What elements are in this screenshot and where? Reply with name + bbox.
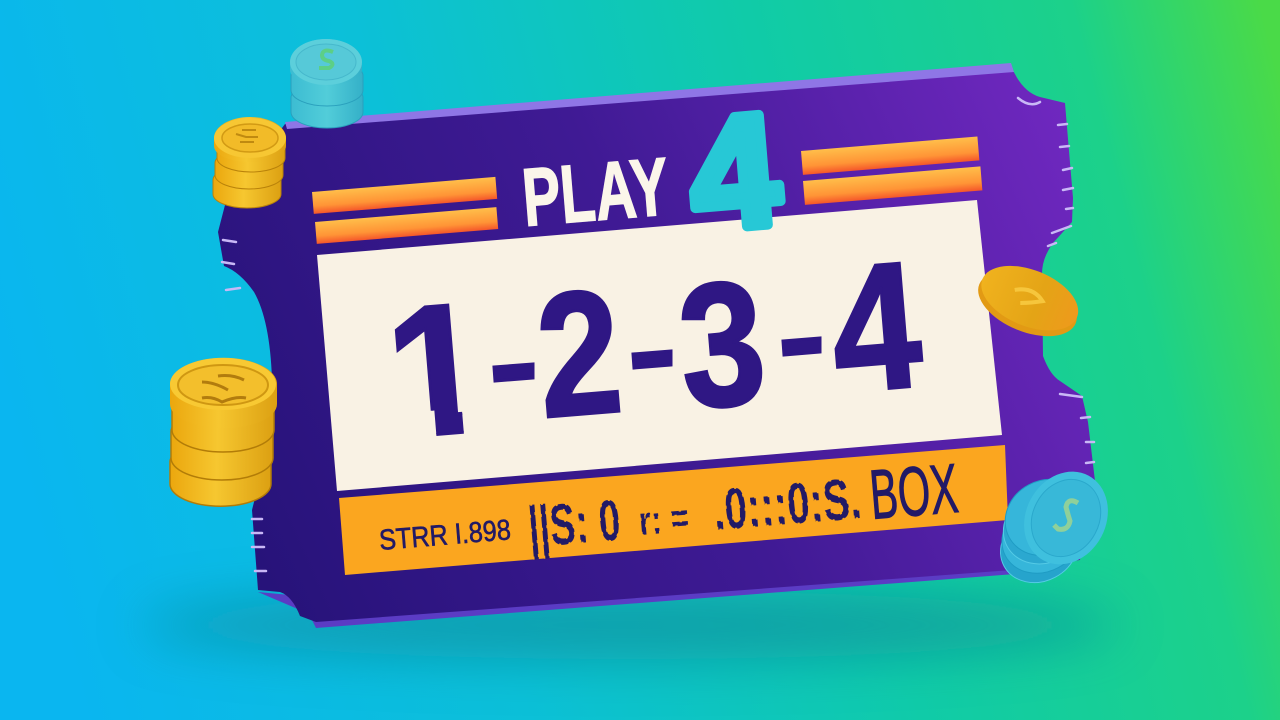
icon: cyan coin stack top — [290, 39, 363, 128]
digit 2: 2 — [530, 253, 628, 455]
BOX: BOX — [867, 449, 961, 534]
dash 1 — [494, 364, 533, 381]
heading: cyan 4: 4 — [683, 79, 786, 265]
ticket body — [218, 66, 1095, 622]
digit 3: 3 — [672, 242, 772, 446]
garbled serial right: .0:::0:S. — [711, 466, 864, 543]
orange strip — [339, 445, 1008, 575]
cream number panel — [317, 200, 1002, 491]
garbled symbol: r: = — [637, 496, 691, 544]
strip text — [378, 449, 961, 560]
dash 3 — [783, 338, 820, 355]
ticket lower edge highlight — [258, 560, 1015, 628]
small code: STRR I.898 — [378, 514, 512, 557]
digit 1: 1 — [379, 263, 494, 478]
dash 2 — [633, 351, 671, 368]
ticket drop shadow — [140, 591, 1120, 659]
icon: yellow coin stack top left — [213, 117, 286, 208]
orange bars right of heading — [801, 136, 982, 205]
ticket top edge highlight — [285, 63, 1014, 129]
torn edge marks — [222, 98, 1094, 571]
panel: purple ticket — [218, 63, 1095, 628]
icon: gold tilted coin right — [969, 253, 1088, 349]
icon: cyan coin stack bottom right — [976, 457, 1124, 596]
orange bars left of heading — [312, 177, 498, 244]
garbled serial left: ||S: 0 — [526, 488, 623, 560]
heading: PLAY: PLAY — [519, 141, 672, 244]
digit 4: 4 — [824, 224, 928, 431]
icon: yellow coin stack left — [170, 358, 277, 506]
number 1-2-3-4 — [394, 262, 924, 436]
